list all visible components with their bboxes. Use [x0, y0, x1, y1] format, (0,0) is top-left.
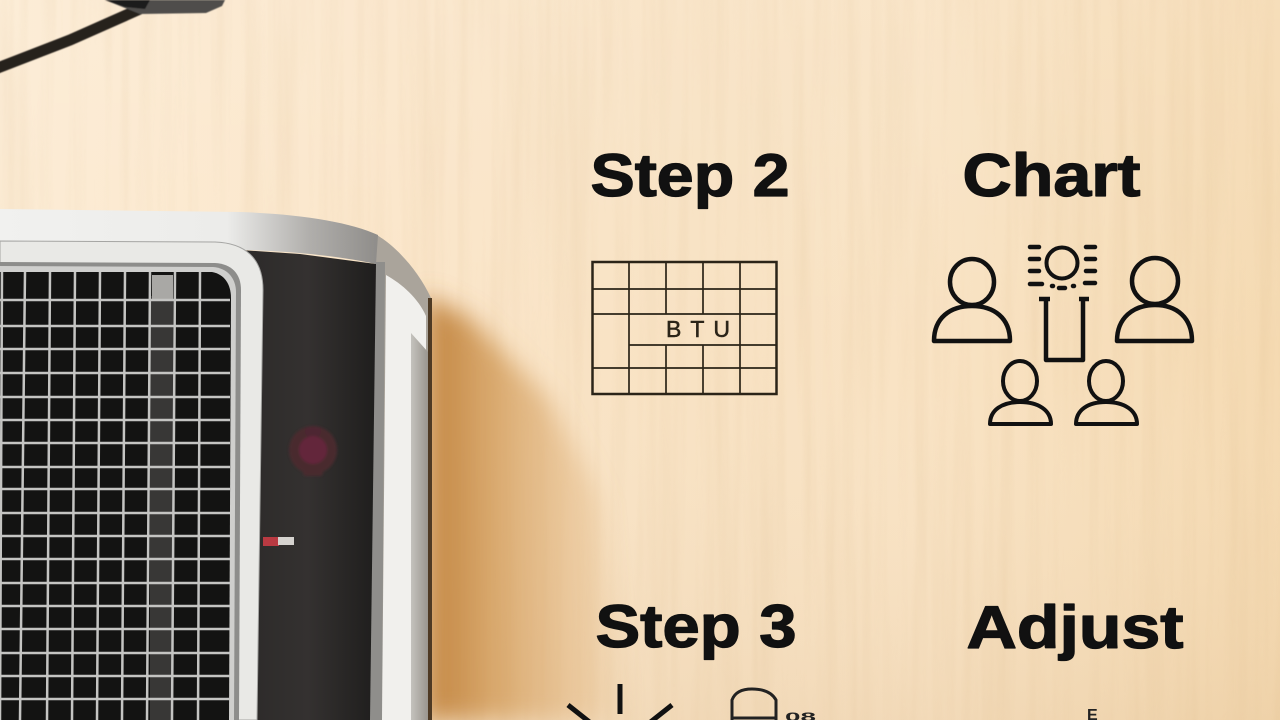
heater cast shadow	[425, 295, 622, 720]
heading: Adjust: Adjust	[966, 594, 1184, 661]
heater white frame	[0, 241, 263, 720]
person left	[934, 259, 1010, 341]
icon: people around chart	[934, 247, 1192, 424]
heater dark side column	[240, 250, 376, 720]
heater top silver band	[0, 209, 378, 264]
BTU label: BTU	[666, 316, 730, 342]
person right	[1117, 258, 1192, 341]
heater inner bezel	[0, 262, 241, 720]
central U-shaped stand	[1039, 299, 1089, 360]
lighter vent column	[150, 296, 173, 720]
red indicator light	[263, 537, 294, 546]
heater vent grille	[0, 272, 231, 720]
heater right side panel	[368, 234, 432, 720]
central sun and dashes	[1030, 247, 1095, 288]
grille lines	[0, 272, 230, 720]
heading: Step 2: Step 2	[590, 142, 790, 209]
heading: Step 3: Step 3	[596, 593, 796, 660]
person lower right	[1076, 361, 1137, 424]
heater unit	[0, 209, 432, 720]
person lower left	[990, 361, 1051, 424]
icon: sun rays	[568, 684, 672, 720]
red emblem	[289, 426, 337, 476]
icon: BTU chart grid	[592, 262, 777, 394]
heading: Chart: Chart	[962, 142, 1141, 209]
power cord and plug	[0, 0, 225, 69]
icon: device with readout	[732, 689, 817, 720]
